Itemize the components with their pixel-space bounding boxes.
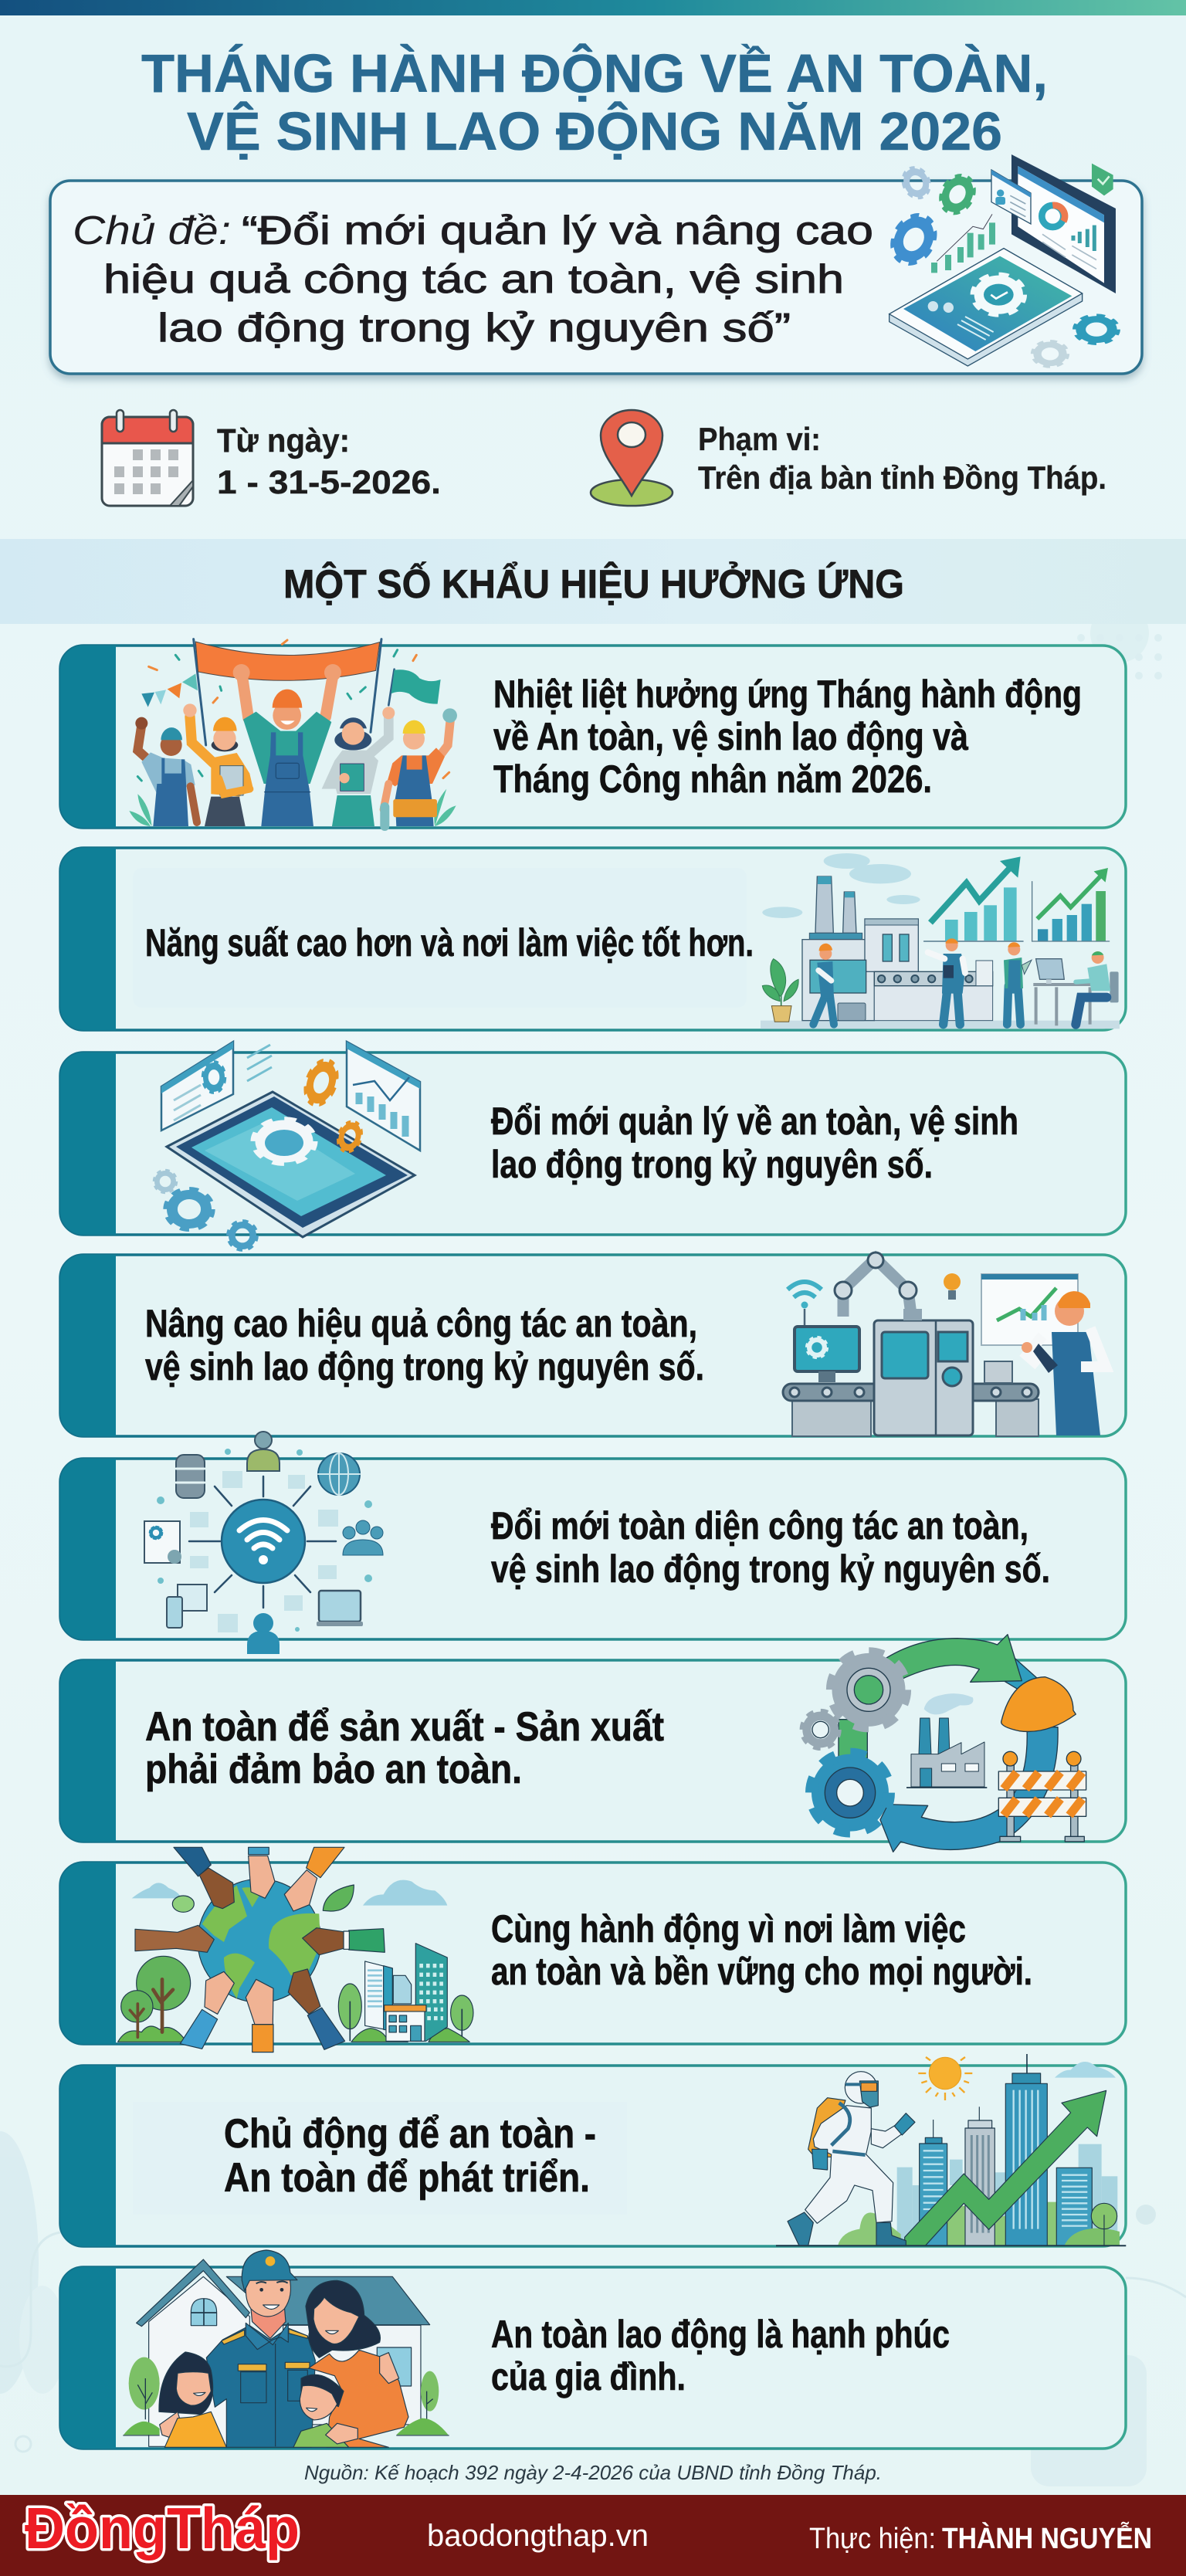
icon: calendar (102, 410, 193, 506)
credit (809, 2521, 1152, 2555)
date text: Từ ngày: (217, 422, 350, 459)
slogan 3 text: Đổi mới quản lý về an toàn, vệ sinh (491, 1100, 1018, 1143)
illustration: connected network (144, 1432, 383, 1654)
panel: slogan 9 (60, 2250, 1126, 2449)
title: THÁNG HÀNH ĐỘNG VỀ AN TOÀN, (141, 42, 1048, 103)
slogan 9 text: của gia đình. (491, 2355, 686, 2398)
illustration: protected runner and growth (776, 2054, 1126, 2246)
slogan 8 text: An toàn để phát triển. (224, 2155, 590, 2201)
illustration: digital tablet (154, 1042, 420, 1249)
worker: walking (813, 944, 834, 1025)
plant (762, 959, 798, 1022)
slogan 4 text: Nâng cao hiệu quả công tác an toàn, (145, 1302, 697, 1345)
section heading: MỘT SỐ KHẨU HIỆU HƯỞNG ỨNG (283, 561, 904, 607)
theme text (73, 208, 873, 351)
slogan 1 text: về An toàn, vệ sinh lao động và (493, 715, 968, 758)
credit: THÀNH NGUYỄN (942, 2521, 1152, 2555)
slogan 6 text (145, 1704, 664, 1792)
worker: right (384, 708, 457, 826)
panel: slogan 1 (60, 639, 1126, 828)
title: VỆ SINH LAO ĐỘNG NĂM 2026 (187, 100, 1002, 161)
date block (102, 410, 441, 506)
slogan 1 text (493, 673, 1082, 801)
logo: ĐồngTháp (25, 2496, 300, 2561)
scope block (591, 410, 1106, 506)
slogan 6 text: An toàn để sản xuất - Sản xuất (145, 1704, 664, 1750)
worker: orange shirt (183, 703, 253, 826)
buildings (920, 2054, 1092, 2246)
worker: centre (233, 664, 341, 826)
date text (217, 422, 441, 501)
house (137, 2259, 430, 2446)
slogan 1 text: Tháng Công nhân năm 2026. (493, 758, 932, 801)
source note: Nguồn: Kế hoạch 392 ngày 2-4-2026 của UBND tỉnh Đồng Tháp. (304, 2461, 882, 2484)
son (293, 2374, 357, 2447)
background decorations (0, 604, 1186, 2486)
slogan 4 text: vệ sinh lao động trong kỷ nguyên số. (145, 1345, 704, 1388)
ground line (776, 2243, 1126, 2248)
hard hat (1001, 1677, 1076, 1731)
city buildings (365, 1944, 447, 2041)
footer (0, 2495, 1186, 2576)
growth arrow (905, 2090, 1106, 2246)
illustration: robot arm and engineer (783, 1252, 1106, 1436)
illustration: worker family and house (123, 2250, 449, 2447)
slogan 9 text (491, 2313, 950, 2398)
scope text: Phạm vi: (698, 421, 821, 457)
slogan 8 text (224, 2111, 596, 2201)
hands (135, 1847, 385, 2052)
worker: left (135, 717, 197, 826)
icon: map pin (591, 410, 673, 506)
scope text (698, 421, 1106, 496)
slogan 8 text: Chủ động để an toàn - (224, 2111, 596, 2157)
worker: clipboard (1004, 942, 1032, 1025)
panel: theme (50, 181, 1142, 374)
leaves (323, 1885, 354, 1911)
runner in protective suit (788, 2072, 915, 2246)
slogan 6 text: phải đảm bảo an toàn. (145, 1747, 522, 1792)
slogan 2 text: Năng suất cao hơn và nơi làm việc tốt hơn. (145, 921, 754, 964)
illustration: workers celebrating (129, 639, 457, 826)
credit: Thực hiện: (809, 2523, 936, 2555)
slogan 7 text: an toàn và bền vững cho mọi người. (491, 1950, 1032, 1993)
panel: slogan 2 (60, 848, 1126, 1030)
engineer (1022, 1291, 1106, 1435)
date text: 1 - 31-5-2026. (217, 464, 441, 501)
panel: slogan 4 (60, 1252, 1126, 1436)
theme text: Chủ đề: (73, 208, 231, 253)
worker: grey shirt (322, 707, 395, 826)
section heading band (0, 539, 1186, 624)
scope text: Trên địa bàn tỉnh Đồng Tháp. (698, 459, 1106, 496)
father (206, 2250, 315, 2447)
road barrier (998, 1751, 1086, 1842)
slogan 4 text (145, 1302, 704, 1388)
sun (918, 2057, 972, 2100)
illustration: hands around the globe (118, 1847, 473, 2052)
factory (906, 1693, 987, 1788)
panel: slogan 7 (60, 1847, 1126, 2052)
mother (306, 2280, 408, 2447)
panel: slogan 3 (60, 1042, 1126, 1249)
theme text: “Đổi mới quản lý và nâng cao (242, 208, 873, 253)
slogan 7 text: Cùng hành động vì nơi làm việc (491, 1907, 966, 1951)
top gradient bar (0, 0, 1186, 15)
panel: slogan 5 (60, 1432, 1126, 1654)
trees and bushes (118, 1956, 473, 2042)
trees (123, 2357, 449, 2435)
slogan 5 text: Đổi mới toàn diện công tác an toàn, (491, 1504, 1028, 1547)
daughter (159, 2352, 226, 2447)
slogan 5 text: vệ sinh lao động trong kỷ nguyên số. (491, 1547, 1050, 1591)
slogan 7 text (491, 1907, 1032, 1993)
slogan 3 text: lao động trong kỷ nguyên số. (491, 1143, 933, 1186)
title (141, 42, 1048, 161)
illustration: factory and growth charts (761, 853, 1120, 1029)
theme text: lao động trong kỷ nguyên số” (158, 306, 791, 351)
slogan 3 text (491, 1100, 1018, 1186)
worker: gesturing (928, 938, 965, 1025)
worker: at desk (1033, 951, 1119, 1025)
illustration: safety and production cycle (802, 1635, 1086, 1852)
icon: digital tablet and gears (886, 154, 1117, 366)
theme text: hiệu quả công tác an toàn, vệ sinh (103, 257, 844, 302)
panel: slogan 6 (60, 1635, 1126, 1852)
slogan 9 text: An toàn lao động là hạnh phúc (491, 2313, 950, 2356)
panel: slogan 8 (60, 2054, 1126, 2246)
website: baodongthap.vn (427, 2519, 649, 2553)
slogan 5 text (491, 1504, 1050, 1591)
